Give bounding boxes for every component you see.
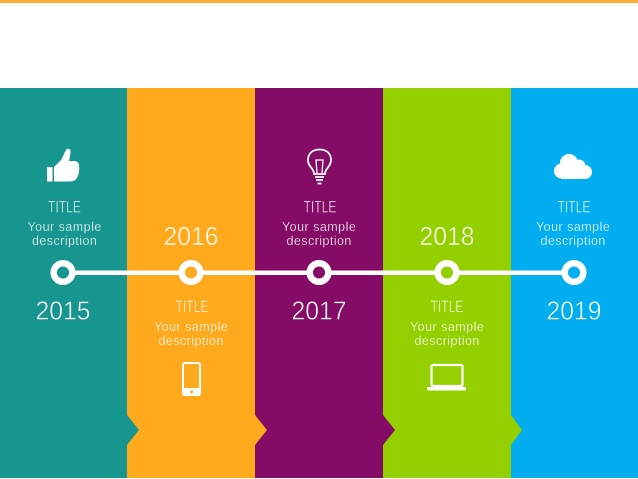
icon: smartphone bbox=[182, 363, 200, 396]
year: 2017: 2017 bbox=[292, 296, 346, 326]
panel: 2016 orange column bbox=[127, 88, 255, 478]
icon: light bulb bbox=[308, 150, 331, 184]
text block: 2017 title and description: Your sample bbox=[282, 220, 356, 234]
text block: 2017 title and description bbox=[282, 198, 356, 248]
text block: 2015 title and description: Your sample bbox=[28, 220, 102, 234]
year: 2015: 2015 bbox=[36, 296, 90, 326]
text block: 2018 title and description: Your sample bbox=[410, 320, 484, 334]
panel: 2019 blue column bbox=[511, 88, 638, 478]
icon: laptop bbox=[427, 365, 466, 390]
arrow: green notch bbox=[511, 415, 522, 445]
text block: 2016 title and description: description bbox=[158, 334, 224, 348]
text block: 2019 title and description: description bbox=[540, 234, 606, 248]
icon: thumbs up bbox=[47, 149, 79, 182]
year: 2016: 2016 bbox=[164, 221, 218, 251]
timeline line bbox=[63, 270, 574, 275]
text block: 2015 title and description bbox=[28, 198, 102, 248]
text block: 2018 title and description: description bbox=[414, 334, 480, 348]
text block: 2016 title and description bbox=[154, 297, 228, 348]
text block: 2015 title and description: description bbox=[32, 234, 97, 248]
text block: 2019 title and description: Your sample bbox=[536, 220, 610, 234]
year: 2018: 2018 bbox=[420, 221, 474, 251]
text block: 2016 title and description: TITLE bbox=[176, 297, 208, 316]
text block: 2017 title and description: TITLE bbox=[304, 198, 336, 216]
text block: 2016 title and description: Your sample bbox=[154, 320, 228, 334]
text block: 2018 title and description bbox=[410, 297, 484, 348]
arrow: orange notch bbox=[255, 415, 267, 445]
panel: 2015 teal column bbox=[0, 88, 127, 478]
text block: 2015 title and description: TITLE bbox=[48, 198, 81, 216]
panel: 2017 purple column bbox=[255, 88, 383, 478]
timeline markers bbox=[54, 263, 583, 282]
text block: 2019 title and description bbox=[536, 198, 610, 248]
text block: 2017 title and description: description bbox=[286, 234, 352, 248]
text block: 2019 title and description: TITLE bbox=[558, 198, 590, 216]
panel: 2018 green column bbox=[383, 88, 511, 478]
arrow: teal notch bbox=[127, 415, 139, 445]
text block: 2018 title and description: TITLE bbox=[430, 297, 464, 316]
year: 2019: 2019 bbox=[546, 296, 602, 326]
arrow: purple notch bbox=[383, 415, 395, 445]
top accent bar bbox=[0, 0, 638, 3]
icon: cloud bbox=[554, 154, 592, 179]
